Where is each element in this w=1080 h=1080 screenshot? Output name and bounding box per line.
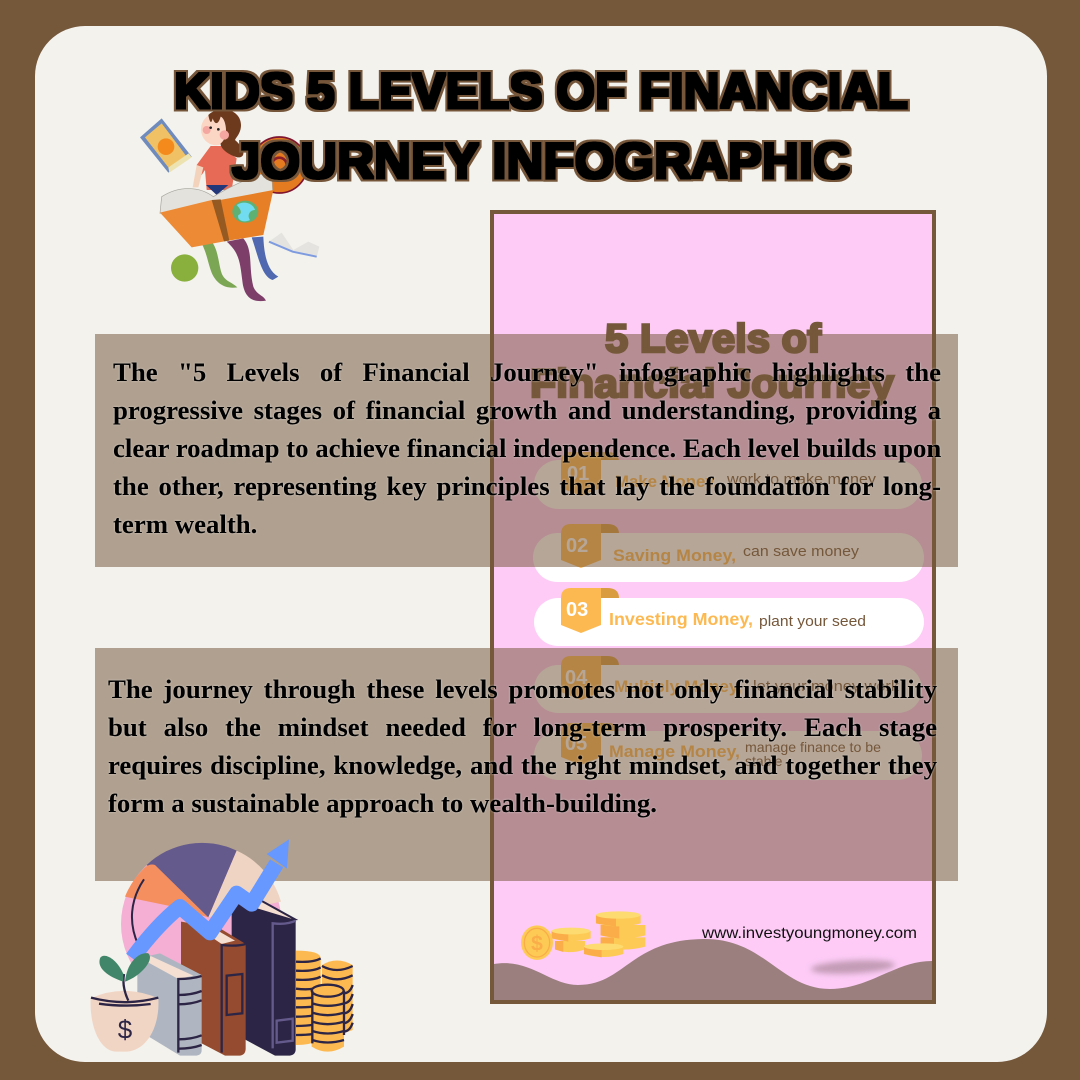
level 3 pill	[534, 588, 924, 646]
level 1 pill: 01	[567, 463, 589, 485]
icon: green ball	[171, 254, 198, 282]
coin stacks	[296, 951, 353, 1052]
level 4 pill: let your money work	[753, 678, 900, 695]
icon: floating book	[140, 118, 192, 173]
paragraph: introduction: the other, representing key principles that lay the foundation for long-	[113, 471, 941, 501]
icon: girl	[193, 109, 243, 195]
paragraph: introduction: progressive stages of financial growth and understanding, providing a	[113, 395, 941, 425]
poster wave footer	[494, 939, 932, 1000]
poster heading: 5 Levels of	[605, 317, 822, 361]
text band: bottom	[95, 648, 958, 881]
navy book	[232, 900, 296, 1056]
level 2 pill: Saving Money,	[613, 546, 736, 565]
illustration: girl reading on a book	[140, 112, 319, 302]
large coin	[521, 925, 553, 960]
level 3 pill: 03	[566, 599, 588, 621]
paragraph: mindset: form a sustainable approach to wealth-building.	[108, 788, 657, 818]
level 1 pill: Make Money,	[615, 472, 718, 491]
paragraph: mindset: requires discipline, knowledge, and the right mindset, and together they	[108, 750, 937, 780]
level 5 pill: stable	[745, 753, 783, 769]
front coin	[584, 947, 623, 957]
arrow head	[267, 839, 289, 869]
level 4 pill: Multiply Money,	[614, 677, 742, 696]
level 1 pill: work to make money	[726, 471, 877, 488]
level 1 pill	[534, 452, 922, 509]
paragraph: introduction: clear roadmap to achieve financial independence. Each level builds upon	[113, 433, 941, 463]
paragraph: mindset	[108, 674, 938, 818]
brown book	[181, 922, 246, 1056]
pink poster panel	[490, 210, 936, 1004]
level 2 pill	[533, 524, 924, 582]
level 4 pill: 04	[565, 667, 588, 689]
level 5 pill	[534, 723, 922, 780]
paragraph: introduction: term wealth.	[113, 509, 257, 539]
icon: ribbons	[202, 237, 278, 301]
level 2 pill: 02	[566, 535, 588, 557]
back stack	[601, 937, 645, 950]
text band: top	[95, 334, 958, 567]
paragraph: introduction	[112, 357, 942, 539]
plant pot: $	[118, 1014, 133, 1044]
growth arrow	[132, 863, 277, 958]
icon: sun circle	[251, 137, 307, 193]
grey book	[137, 953, 202, 1056]
level 4 pill	[534, 656, 922, 713]
paragraph: introduction: The "5 Levels of Financial Journey" infographic highlights the	[113, 357, 941, 387]
icon: open orange book	[160, 172, 273, 247]
icon: gold coins: $	[531, 932, 543, 956]
paragraph: mindset: The journey through these levels promotes not only financial stability	[108, 674, 937, 704]
level 3 pill: plant your seed	[759, 613, 866, 630]
level 5 pill: 05	[565, 733, 587, 755]
pie chart	[121, 843, 282, 1004]
icon: small open book	[269, 233, 319, 257]
icon: gold coins	[521, 911, 645, 960]
level 2 pill: can save money	[743, 543, 860, 560]
level 5 pill: manage finance to be	[745, 739, 881, 755]
left stack	[555, 941, 585, 952]
website url: www.investyoungmoney.com	[701, 925, 917, 942]
paragraph: mindset: but also the mindset needed for long-term prosperity. Each stage	[108, 712, 937, 742]
title: KIDS 5 LEVELS OF FINANCIAL	[174, 63, 908, 119]
plant pot	[91, 953, 158, 1052]
level 5 pill: Manage Money,	[609, 742, 740, 761]
poster heading: Financial Journey	[530, 362, 895, 406]
title	[174, 63, 910, 189]
illustration: growth chart, books, plant and coins	[90, 840, 354, 1056]
title: JOURNEY INFOGRAPHIC	[232, 133, 850, 189]
level 3 pill: Investing Money,	[609, 609, 753, 629]
poster heading	[530, 317, 895, 406]
blurred shadow	[811, 958, 895, 976]
